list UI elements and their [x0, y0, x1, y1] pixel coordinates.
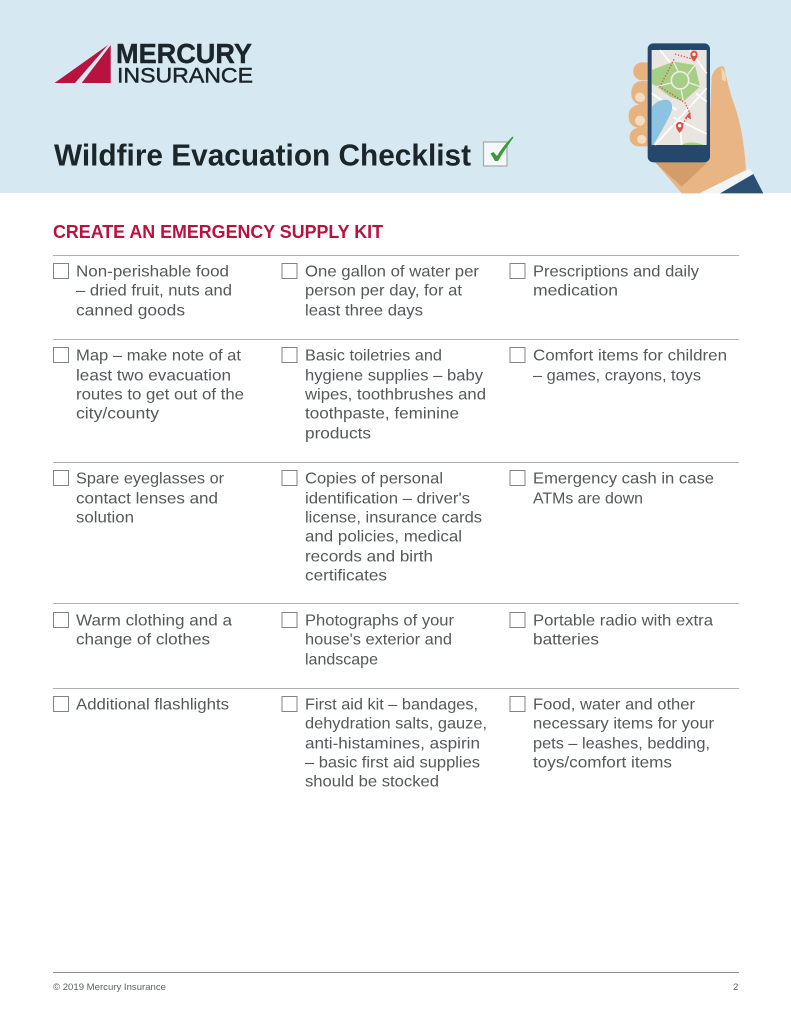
- item: toiletries: products: [305, 426, 371, 442]
- item: identification: records and birth: [305, 548, 433, 566]
- item: warm clothing: [54, 612, 232, 648]
- item: water: least three days: [305, 302, 423, 320]
- illustration: hand holding phone with map: [629, 43, 763, 193]
- item: toiletries: Basic toiletries and: [305, 348, 442, 364]
- item: identification: [282, 470, 482, 584]
- footer copyright: © 2019 Mercury Insurance: [53, 982, 166, 993]
- item: water: person per day, for at: [305, 282, 463, 300]
- item: flashlights: Additional flashlights: [76, 696, 229, 714]
- header band: [0, 0, 791, 193]
- item: comfort items: – games, crayons, toys: [533, 368, 701, 384]
- item: photographs: landscape: [305, 652, 378, 668]
- item: non-perishable food: [54, 264, 232, 320]
- item: toiletries: wipes, toothbrushes and: [304, 386, 486, 404]
- item: portable radio: Portable radio with extra: [533, 612, 713, 630]
- item: warm clothing: change of clothes: [76, 632, 210, 648]
- item: non-perishable food: Non-perishable food: [76, 264, 229, 280]
- item: identification: certificates: [305, 568, 387, 584]
- phone screen map: [652, 50, 707, 145]
- item: portable radio: batteries: [533, 632, 599, 648]
- item: map: [54, 348, 244, 422]
- hand: [650, 63, 746, 193]
- item: toiletries: toothpaste, feminine: [305, 406, 459, 422]
- item: eyeglasses: contact lenses and: [76, 490, 218, 508]
- item: eyeglasses: solution: [76, 510, 134, 526]
- item: prescriptions: medication: [533, 282, 618, 300]
- item: first aid kit: should be stocked: [305, 774, 439, 790]
- sleeve: [720, 174, 763, 193]
- phone body: [648, 43, 710, 162]
- item: prescriptions: Prescriptions and daily: [533, 264, 699, 280]
- item: photographs: Photographs of your: [305, 612, 455, 630]
- item: portable radio: [510, 612, 713, 648]
- item: warm clothing: Warm clothing and a: [76, 612, 232, 630]
- item: map: routes to get out of the: [76, 386, 244, 404]
- shirt cuff: [699, 168, 753, 193]
- page number: 2: [733, 982, 738, 993]
- logo: Mercury Insurance: [54, 38, 253, 88]
- item: toiletries: hygiene supplies – baby: [305, 368, 483, 384]
- item: identification: license, insurance cards: [305, 510, 482, 526]
- item: identification: identification – driver's: [305, 490, 470, 508]
- item: prescriptions: [510, 264, 699, 300]
- item: first aid kit: [282, 696, 487, 790]
- logo: Mercury Insurance: INSURANCE: [117, 64, 253, 88]
- item: pet supplies: Food, water and other: [533, 696, 696, 714]
- item: non-perishable food: – dried fruit, nuts and: [76, 282, 232, 300]
- item: first aid kit: – basic first aid supplies: [305, 754, 480, 772]
- item: toiletries: [282, 348, 486, 442]
- section heading: CREATE AN EMERGENCY SUPPLY KIT: [53, 221, 384, 242]
- item: first aid kit: anti-histamines, aspirin: [305, 736, 480, 752]
- item: comfort items: Comfort items for children: [533, 348, 727, 364]
- item: pet supplies: pets – leashes, bedding,: [533, 736, 710, 752]
- item: water: One gallon of water per: [305, 264, 480, 280]
- item: water: [282, 264, 480, 320]
- item: map: Map – make note of at: [76, 348, 242, 364]
- item: emergency cash: [510, 470, 714, 508]
- item: pet supplies: [510, 696, 715, 772]
- item: comfort items: [510, 348, 727, 384]
- item: first aid kit: First aid kit – bandages,: [305, 696, 478, 714]
- item: photographs: [282, 612, 455, 668]
- item: emergency cash: ATMs are down: [533, 490, 643, 508]
- item: map: least two evacuation: [76, 368, 231, 384]
- item: emergency cash: Emergency cash in case: [533, 470, 714, 488]
- item: map: city/county: [76, 406, 159, 422]
- item: identification: Copies of personal: [305, 470, 443, 488]
- item: non-perishable food: canned goods: [76, 302, 185, 320]
- item: identification: and policies, medical: [305, 528, 462, 546]
- item: first aid kit: dehydration salts, gauze,: [305, 716, 487, 732]
- item: eyeglasses: Spare eyeglasses or: [76, 470, 225, 488]
- item: photographs: house's exterior and: [305, 632, 452, 648]
- item: eyeglasses: [54, 470, 225, 526]
- item: pet supplies: toys/comfort items: [533, 754, 672, 772]
- fingers: [629, 62, 657, 146]
- title: Wildfire Evacuation Checklist: [54, 138, 471, 172]
- logo: Mercury Insurance: MERCURY: [116, 38, 252, 69]
- icon: checked box: [484, 136, 514, 166]
- item: pet supplies: necessary items for your: [533, 716, 715, 732]
